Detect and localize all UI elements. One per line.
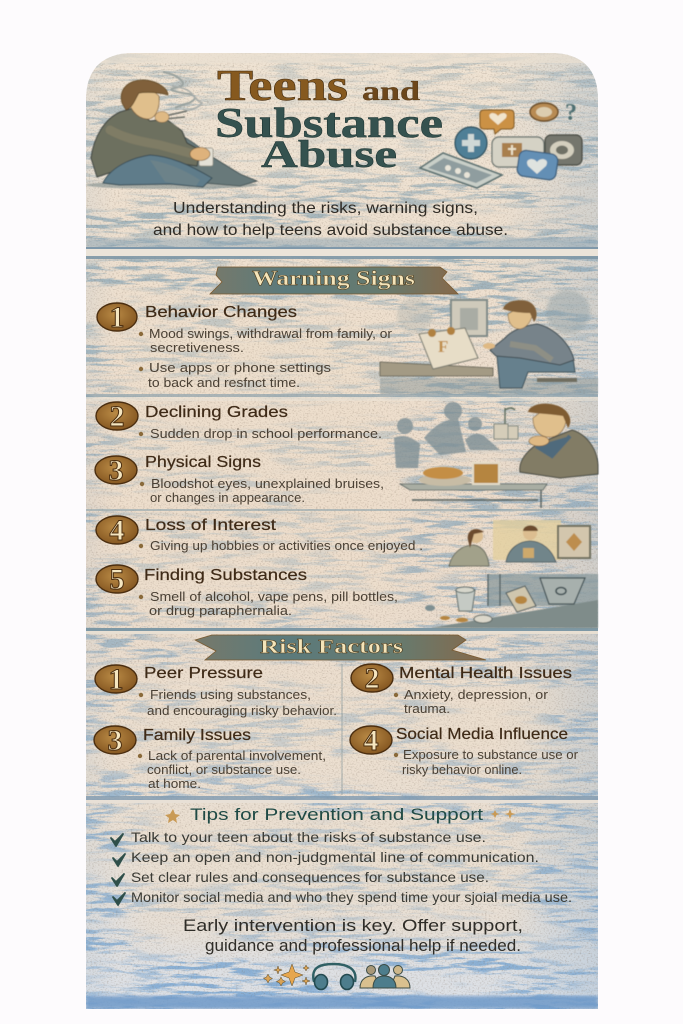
risk factor 1: peer pressure: and encouraging risky behavior. xyxy=(147,704,337,718)
tips heading xyxy=(165,805,516,824)
warning sign 4: loss of interest xyxy=(96,514,423,553)
warning sign 2: declining grades: 2 xyxy=(110,400,124,433)
title: and xyxy=(362,76,420,106)
risk factor 1: peer pressure xyxy=(95,663,337,718)
risk factor 3: family issues: at home. xyxy=(148,777,201,791)
warning sign 1: behavior changes: Mood swings, withdrawal from family, or xyxy=(149,327,392,341)
banner: risk factors: Risk Factors xyxy=(260,636,403,658)
risk factor 2: mental health issues: trauma. xyxy=(404,702,450,716)
tips checklist: Talk to your teen about the risks of substance use. xyxy=(131,829,486,845)
infographic canvas xyxy=(86,53,600,1009)
illustration: teen at desk with failing grade xyxy=(380,290,598,394)
illustration: social media icons and tablet: ? xyxy=(565,100,577,126)
icon: sparkles xyxy=(264,964,310,986)
warning sign 2: declining grades: Sudden drop in school performance. xyxy=(150,427,382,441)
subtitle: and how to help teens avoid substance abuse. xyxy=(153,222,508,239)
banner: warning signs xyxy=(210,266,458,294)
illustration: worried teen and shadow figures xyxy=(394,402,598,508)
banner: warning signs: Warning Signs xyxy=(252,266,415,290)
risk factor 4: social media influence: Exposure to substance use or xyxy=(403,748,578,762)
risk factor 1: peer pressure: Peer Pressure xyxy=(144,665,263,682)
warning sign 1: behavior changes: 1 xyxy=(110,301,124,334)
subtitle: Understanding the risks, warning signs, xyxy=(173,200,478,217)
closing message: Early intervention is key. Offer support, xyxy=(183,916,523,935)
panel: textured background xyxy=(86,53,598,1009)
risk factor 4: social media influence: 4 xyxy=(364,724,378,757)
closing message xyxy=(183,916,523,955)
illustration: teen at desk with failing grade: F xyxy=(438,337,448,356)
warning sign 3: physical signs: Bloodshot eyes, unexplained bruises, xyxy=(151,477,384,491)
risk factor 1: peer pressure: 1 xyxy=(108,663,124,696)
warning sign 1: behavior changes: to back and resfnct time. xyxy=(148,376,300,390)
title: Substance xyxy=(215,101,443,147)
warning sign 5: finding substances: Finding Substances xyxy=(144,567,307,584)
tips checklist: Set clear rules and consequences for substance use. xyxy=(131,869,489,885)
illustration: teen sitting with cigarette and cup xyxy=(86,72,258,189)
warning sign 3: physical signs: or changes in appearance. xyxy=(150,491,305,505)
tips checklist xyxy=(111,829,572,905)
risk factor 3: family issues: Family Issues xyxy=(143,727,251,744)
warning sign 4: loss of interest: Giving up hobbies or activities once enjoyed . xyxy=(150,539,423,553)
subtitle xyxy=(153,200,508,239)
risk factor 4: social media influence xyxy=(350,724,578,777)
warning sign 4: loss of interest: Loss of Interest xyxy=(145,517,277,534)
warning sign 3: physical signs xyxy=(95,454,384,505)
warning sign 3: physical signs: Physical Signs xyxy=(145,454,261,471)
warning sign 3: physical signs: 3 xyxy=(108,454,124,487)
risk factor 3: family issues xyxy=(94,724,326,791)
title xyxy=(215,61,443,176)
warning sign 5: finding substances: or drug paraphernalia. xyxy=(149,604,292,618)
warning sign 1: behavior changes: secretiveness. xyxy=(150,341,244,355)
banner: risk factors xyxy=(195,635,486,660)
tips checklist: Keep an open and non-judgmental line of communication. xyxy=(131,849,539,865)
risk factor 2: mental health issues: Mental Health Issues xyxy=(399,665,572,682)
closing message: guidance and professional help if needed. xyxy=(205,936,521,955)
risk factor 4: social media influence: risky behavior online. xyxy=(402,763,522,777)
warning sign 1: behavior changes: Use apps or phone settings xyxy=(149,361,331,375)
tips heading: Tips for Prevention and Support xyxy=(190,805,483,824)
tips checklist: Monitor social media and who they spend time your sjoial media use. xyxy=(131,889,572,905)
risk factor 3: family issues: conflict, or substance use. xyxy=(147,763,301,777)
warning sign 1: behavior changes: Behavior Changes xyxy=(145,304,297,321)
risk factor 3: family issues: Lack of parental involvement, xyxy=(148,749,326,763)
warning sign 5: finding substances xyxy=(96,563,398,618)
title: Abuse xyxy=(261,133,397,176)
icon: people group xyxy=(360,964,410,988)
risk factor 2: mental health issues xyxy=(351,662,572,716)
risk factor 2: mental health issues: Anxiety, depression, or xyxy=(404,688,548,702)
icon: headphones xyxy=(313,964,355,990)
risk factor 2: mental health issues: 2 xyxy=(364,662,380,695)
warning sign 2: declining grades xyxy=(96,400,382,441)
illustration: social media icons and tablet xyxy=(420,100,582,188)
title: Teens xyxy=(217,61,348,110)
warning sign 2: declining grades: Declining Grades xyxy=(145,404,288,421)
warning sign 5: finding substances: Smell of alcohol, vape pens, pill bottles, xyxy=(150,590,398,604)
warning sign 5: finding substances: 5 xyxy=(110,563,124,596)
warning sign 1: behavior changes xyxy=(97,301,392,390)
risk factor 4: social media influence: Social Media Influence xyxy=(396,726,568,743)
risk factor 3: family issues: 3 xyxy=(108,724,122,757)
illustration: friends and hobbies xyxy=(449,520,590,566)
illustration: substances on table xyxy=(425,574,598,628)
risk factor 1: peer pressure: Friends using substances, xyxy=(150,688,311,702)
warning sign 4: loss of interest: 4 xyxy=(110,514,124,547)
